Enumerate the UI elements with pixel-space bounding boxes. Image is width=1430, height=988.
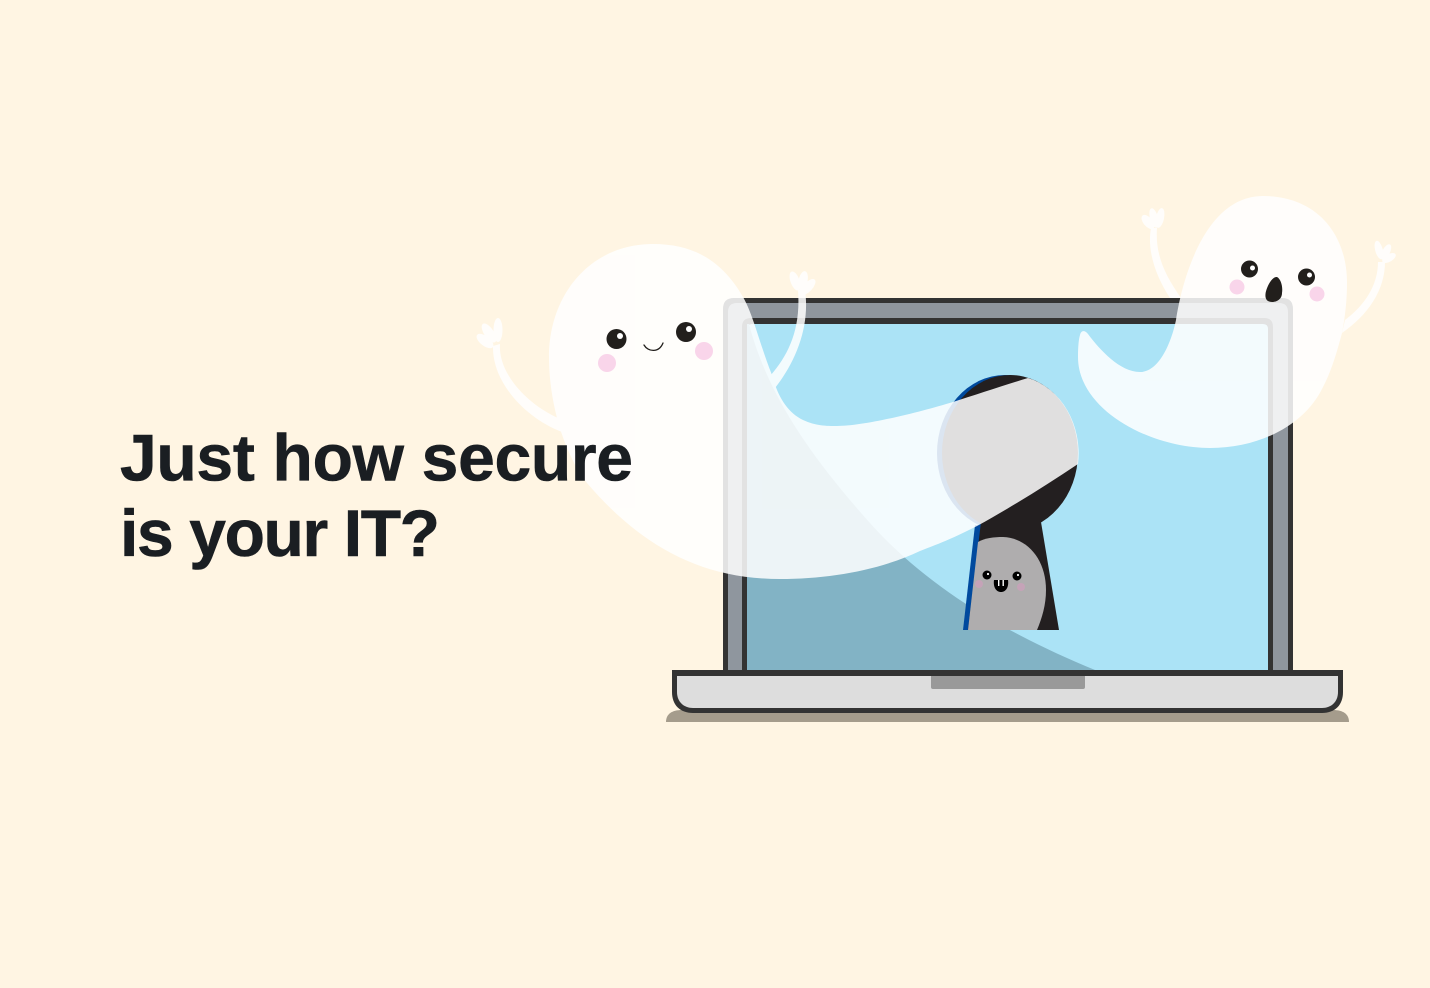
keyhole opening xyxy=(942,375,1078,630)
lid bezel xyxy=(728,303,1288,672)
left ghost xyxy=(474,244,1079,579)
base top surface xyxy=(677,676,1338,708)
trackpad notch xyxy=(931,676,1085,689)
laptop lid frame xyxy=(723,298,1293,672)
title xyxy=(120,420,633,570)
keyhole xyxy=(937,375,1078,630)
keyhole blue edge xyxy=(937,375,1073,630)
small ghost in keyhole xyxy=(968,537,1046,630)
lid inner edge xyxy=(742,318,1273,672)
left ghost body and arms xyxy=(474,244,1079,579)
left ghost face xyxy=(598,322,713,372)
laptop screen xyxy=(747,324,1268,672)
right ghost body and arms xyxy=(1078,196,1397,448)
title: Just how secure xyxy=(120,420,633,494)
right ghost face xyxy=(1230,260,1324,302)
right ghost xyxy=(1078,196,1397,448)
title: is your IT? xyxy=(120,496,440,570)
small ghost face xyxy=(975,570,1025,592)
laptop ground shadow xyxy=(666,710,1349,722)
base xyxy=(672,670,1343,713)
screen shadow xyxy=(747,324,1095,670)
laptop xyxy=(666,298,1349,722)
small ghost body xyxy=(968,537,1046,630)
